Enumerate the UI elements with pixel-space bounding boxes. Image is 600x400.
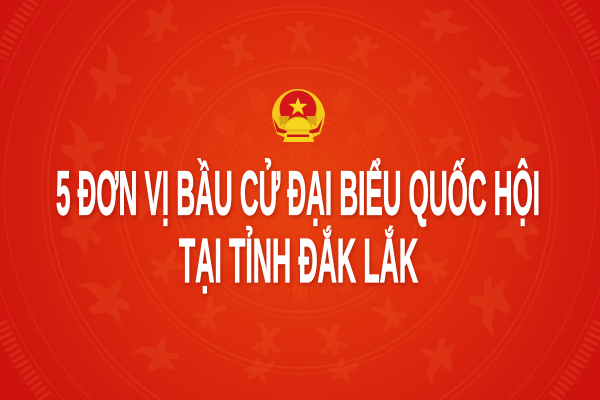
icon: national emblem of Vietnam — [272, 89, 325, 142]
drum figures: human ring — [131, 21, 469, 358]
drum figures: bird ring — [57, 0, 543, 386]
drum figures: inner petals — [208, 85, 392, 302]
emblem red side ribbons — [273, 118, 323, 134]
emblem red disc — [280, 90, 316, 128]
emblem wreath — [272, 89, 325, 138]
title — [56, 160, 540, 296]
emblem star — [288, 97, 308, 115]
emblem base ribbon — [283, 133, 314, 142]
central star rays — [220, 110, 380, 270]
emblem side wheat — [279, 116, 317, 126]
emblem cogwheel — [284, 117, 312, 130]
